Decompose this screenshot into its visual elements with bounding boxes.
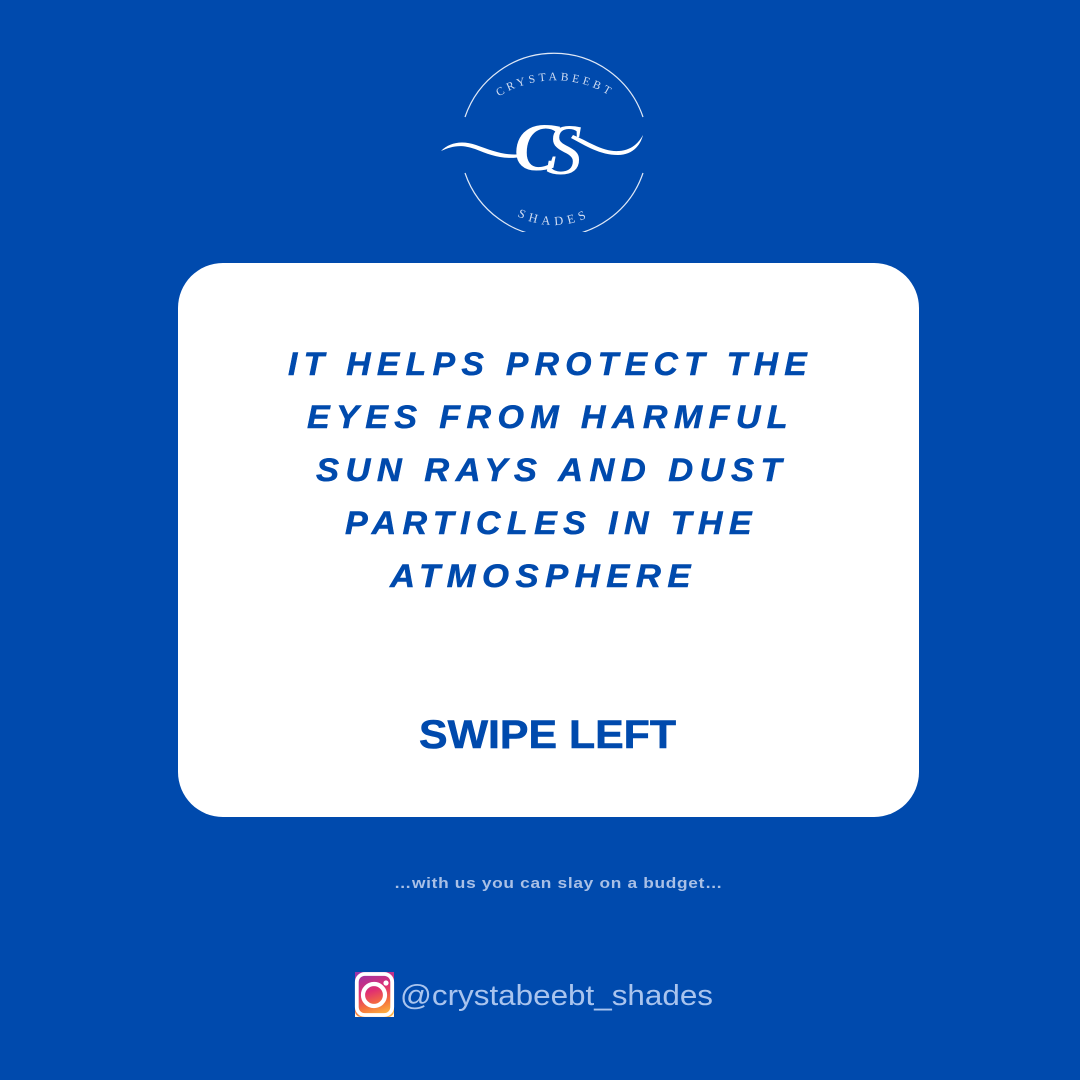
message line 5: ATMOSPHERE (389, 558, 697, 594)
swipe left call to action: SWIPE LEFT (419, 713, 676, 757)
logo monogram CS: S (546, 110, 582, 190)
instagram handle: @crystabeebt_shades (400, 980, 713, 1012)
logo monogram CS: C (514, 109, 560, 185)
logo left swash (441, 143, 522, 158)
card message (288, 346, 813, 594)
message line 2: EYES FROM HARMFUL (307, 399, 794, 435)
icon: instagram (355, 972, 394, 1017)
logo text: CRYSTABEEBT: CRYSTABEEBT (496, 72, 612, 96)
logo: Crystabeebt Shades (441, 52, 644, 232)
tagline: …with us you can slay on a budget… (394, 875, 723, 892)
logo ring: bottom arc (465, 173, 643, 237)
message line 4: PARTICLES IN THE (345, 505, 758, 541)
logo monogram CS (516, 125, 581, 174)
white card (178, 263, 919, 817)
message line 3: SUN RAYS AND DUST (316, 452, 788, 488)
logo right swash (571, 135, 643, 155)
message line 1: IT HELPS PROTECT THE (288, 346, 813, 382)
logo ring: top arc (465, 53, 643, 117)
logo text: SHADES: SHADES (518, 210, 586, 226)
